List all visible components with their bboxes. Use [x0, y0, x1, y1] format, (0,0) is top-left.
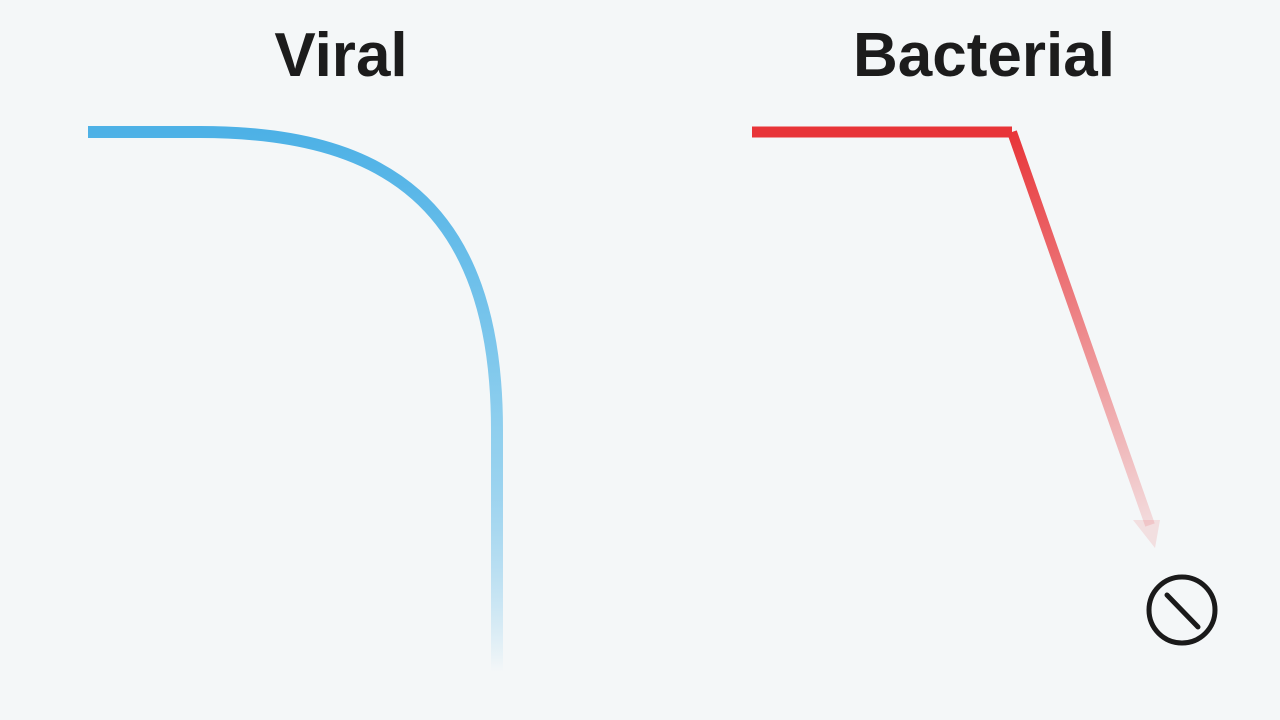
chart line: viral curve — [88, 132, 497, 672]
title: Bacterial: Bacterial — [853, 21, 1115, 90]
icon: prohibited — [1149, 577, 1215, 643]
title: Viral: Viral — [274, 21, 408, 90]
chart line: bacterial drop arrow — [752, 132, 1160, 548]
